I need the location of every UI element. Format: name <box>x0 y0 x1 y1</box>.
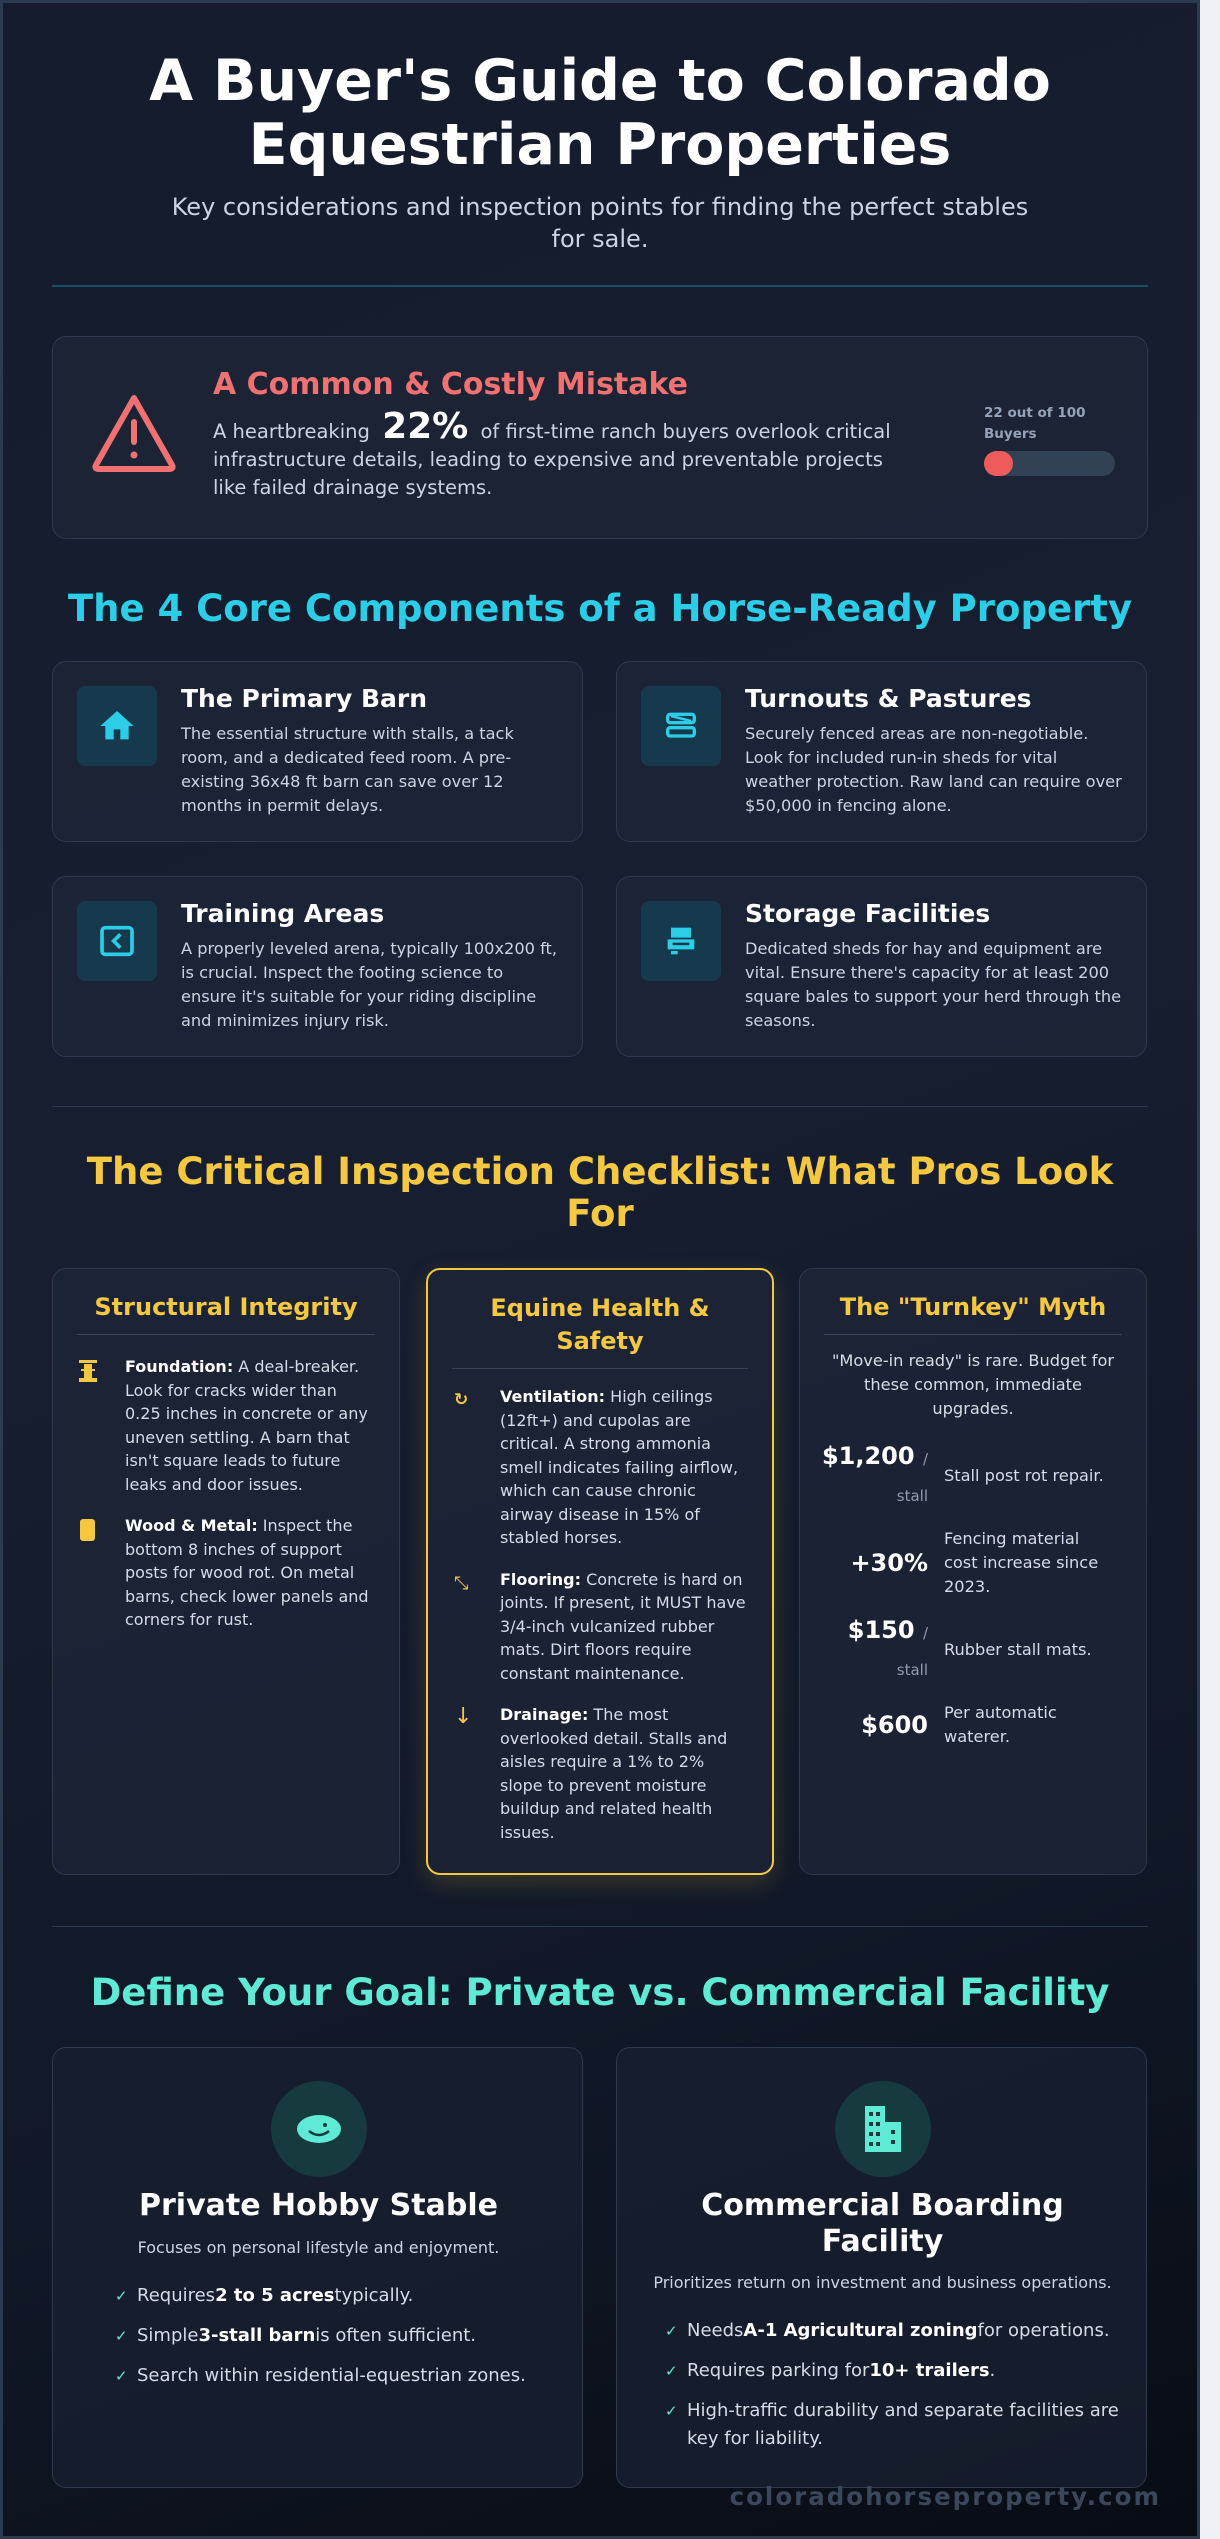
item: flooring <box>454 1570 746 1682</box>
column: structural integrity <box>52 1268 400 1875</box>
card: training: and minimizes injury risk. <box>181 1011 389 1030</box>
stat: mats <box>848 1616 1092 1679</box>
card: training: A properly leveled arena, typically 100x200 ft, <box>181 939 557 958</box>
item: flooring: joints. If present, it MUST have <box>500 1593 746 1612</box>
card: primary barn: months in permit delays. <box>181 796 383 815</box>
item: flooring: 3/4-inch vulcanized rubber <box>500 1616 714 1636</box>
stat: fencing: 2023. <box>944 1577 990 1596</box>
item: foundation: isn't square leads to future <box>125 1451 340 1470</box>
item: ventilation: (12ft+) and cupolas are <box>500 1410 691 1430</box>
column: equine health <box>426 1268 774 1875</box>
icon: storage <box>641 901 721 981</box>
heading: 4 core components: The 4 Core Components of a Horse-Ready Property <box>68 587 1132 630</box>
alert body: A heartbreaking 22% of first-time ranch buyers overlook critical infrastructure details, leading to expensive and preventable projects like failed drainage systems. <box>213 406 891 499</box>
item: drainage: aisles require a 1% to 2% <box>500 1752 704 1771</box>
item: ventilation: airway disease in 15% of <box>500 1504 700 1524</box>
icon: fence <box>641 686 721 766</box>
item: drainage: slope to prevent moisture <box>500 1776 706 1794</box>
alert heading: A Common & Costly Mistake <box>213 367 688 402</box>
item: foundation: leaks and door issues. <box>125 1474 303 1494</box>
item: drainage <box>454 1704 727 1842</box>
item: ventilation: stabled horses. <box>500 1528 622 1547</box>
card: primary barn: The essential structure with stalls, a tack <box>181 724 514 743</box>
item: wood and metal: bottom 8 inches of support <box>125 1540 342 1558</box>
heading: define your goal: Define Your Goal: Private vs. Commercial Facility <box>91 1971 1109 2014</box>
card: primary barn: room, and a dedicated feed room. A pre- <box>181 748 511 767</box>
title: Equestrian Properties <box>249 112 951 178</box>
title: A Buyer's Guide to Colorado <box>149 48 1051 114</box>
card: commercial boarding: Commercial Boarding <box>701 2188 1064 2223</box>
card: primary barn: The Primary Barn <box>181 684 427 713</box>
item: wood and metal: Wood & Metal: Inspect the <box>125 1516 352 1535</box>
item: foundation <box>79 1357 368 1494</box>
card: storage: Dedicated sheds for hay and equipment are <box>745 939 1102 958</box>
icon: building <box>835 2081 931 2177</box>
card: private hobby stable: Focuses on personal lifestyle and enjoyment. <box>138 2238 499 2257</box>
item: ventilation: ↻ <box>454 1390 468 1410</box>
stat: mats: stall <box>897 1661 928 1679</box>
card: primary barn: existing 36x48 ft barn can save over 12 <box>181 772 504 791</box>
icon: arena <box>77 901 157 981</box>
item: drainage: ↓ <box>454 1704 472 1729</box>
list: commercial: NeedsA-1 Agricultural zoningfor operations. <box>687 2320 1110 2341</box>
item: wood and metal <box>80 1516 369 1629</box>
item: drainage: Drainage: The most <box>500 1705 668 1724</box>
card: commercial boarding <box>616 2047 1147 2488</box>
column: equine health: Equine Health & <box>490 1294 710 1322</box>
item: flooring: Flooring: Concrete is hard on <box>500 1570 743 1588</box>
watermark: coloradohorseproperty.com <box>730 2482 1161 2511</box>
stat: waterer: waterer. <box>944 1727 1010 1746</box>
card: primary barn <box>52 661 583 842</box>
item: flooring: mats. Dirt floors require <box>500 1640 691 1659</box>
item: ventilation: Ventilation: High ceilings <box>500 1387 713 1406</box>
progress stat: Buyers <box>984 426 1037 442</box>
stat: stall repair: $1,200 / <box>822 1442 928 1470</box>
card: storage: seasons. <box>745 1011 816 1030</box>
list: commercial: Requires parking for10+ trailers. <box>687 2360 995 2381</box>
card: commercial boarding: Facility <box>822 2224 943 2259</box>
title <box>149 48 1051 178</box>
item: ventilation: which can cause chronic <box>500 1481 696 1500</box>
progress stat <box>984 405 1115 476</box>
item: ventilation <box>454 1387 738 1547</box>
item: flooring: ⤡ <box>454 1572 468 1594</box>
list: private <box>117 2285 526 2386</box>
item: wood and metal: barns, check lower panels and <box>125 1586 369 1606</box>
item: foundation: 0.25 inches in concrete or any <box>125 1404 368 1423</box>
column: equine health: Safety <box>556 1327 644 1355</box>
icon: warning triangle <box>92 395 176 472</box>
item: wood and metal: posts for wood rot. On metal <box>125 1563 354 1582</box>
stat: fencing: Fencing material <box>944 1529 1079 1548</box>
card: training <box>52 876 583 1057</box>
card: storage: square bales to support your herd through the <box>745 987 1121 1006</box>
item: drainage: issues. <box>500 1822 555 1842</box>
stat: mats: $150 / <box>848 1616 928 1644</box>
card: storage: vital. Ensure there's capacity for at least 200 <box>745 963 1109 982</box>
item: drainage: overlooked detail. Stalls and <box>500 1728 727 1748</box>
list: commercial <box>667 2320 1119 2449</box>
item: flooring: constant maintenance. <box>500 1664 685 1682</box>
stat: stall repair: stall <box>897 1487 928 1505</box>
card: turnouts: weather protection. Raw land can require over <box>745 772 1122 791</box>
list: private: Simple3-stall barnis often sufficient. <box>137 2325 476 2346</box>
stat: fencing: cost increase since <box>944 1553 1098 1572</box>
item: foundation: uneven settling. A barn that <box>125 1428 350 1446</box>
card: training: Training Areas <box>181 899 384 928</box>
item: foundation: Foundation: A deal-breaker. <box>125 1357 359 1376</box>
card: commercial boarding: Prioritizes return on investment and business operations. <box>653 2273 1112 2292</box>
card: turnouts <box>616 661 1147 842</box>
icon: house <box>77 686 157 766</box>
stat: waterer: Per automatic <box>944 1703 1057 1722</box>
stat: stall repair <box>822 1442 1104 1505</box>
card: storage: Storage Facilities <box>745 899 990 928</box>
heading: inspection checklist: The Critical Inspection Checklist: What Pros Look For <box>87 1150 1113 1235</box>
item: ventilation: smell indicates failing airflow, <box>500 1458 738 1476</box>
icon: smile <box>271 2081 367 2177</box>
column: structural integrity: Structural Integrity <box>94 1293 358 1321</box>
stat: stall repair: Stall post rot repair. <box>944 1466 1104 1485</box>
item: drainage: buildup and related health <box>500 1799 712 1818</box>
alert card: common mistake <box>52 336 1148 539</box>
card: private hobby stable: Private Hobby Stable <box>139 2188 498 2223</box>
stat: waterer: $600 <box>861 1711 928 1739</box>
stat: mats: Rubber stall mats. <box>944 1640 1092 1659</box>
card: turnouts: Look for included run-in sheds for vital <box>745 748 1057 767</box>
stat: fencing: +30% <box>850 1549 928 1577</box>
stat: waterer <box>861 1703 1057 1746</box>
stat: fencing <box>850 1529 1098 1596</box>
column: turnkey myth: The "Turnkey" Myth <box>840 1293 1106 1321</box>
column: turnkey myth <box>799 1268 1147 1875</box>
list: private: Search within residential-equestrian zones. <box>137 2365 526 2386</box>
progress stat: 22 out of 100 <box>984 405 1086 421</box>
item: foundation: Look for cracks wider than <box>125 1380 337 1400</box>
card: turnouts: Turnouts & Pastures <box>745 684 1032 713</box>
card: training: ensure it's suitable for your riding discipline <box>181 987 536 1006</box>
card: private hobby stable <box>52 2047 583 2488</box>
card: training: is crucial. Inspect the footing science to <box>181 963 503 982</box>
card: turnouts: Securely fenced areas are non-negotiable. <box>745 724 1088 743</box>
card: turnouts: $50,000 in fencing alone. <box>745 796 952 815</box>
column: turnkey myth: "Move-in ready" is rare. Budget for these common, immediate upgrades. <box>832 1351 1114 1418</box>
item: ventilation: critical. A strong ammonia <box>500 1434 711 1453</box>
card: storage <box>616 876 1147 1057</box>
list: private: Requires2 to 5 acrestypically. <box>137 2285 413 2306</box>
list: commercial: High-traffic durability and separate facilities are key for liability. <box>687 2400 1119 2449</box>
item: wood and metal: corners for rust. <box>125 1610 253 1629</box>
subtitle: Key considerations and inspection points for finding the perfect stables for sale. <box>172 193 1028 253</box>
